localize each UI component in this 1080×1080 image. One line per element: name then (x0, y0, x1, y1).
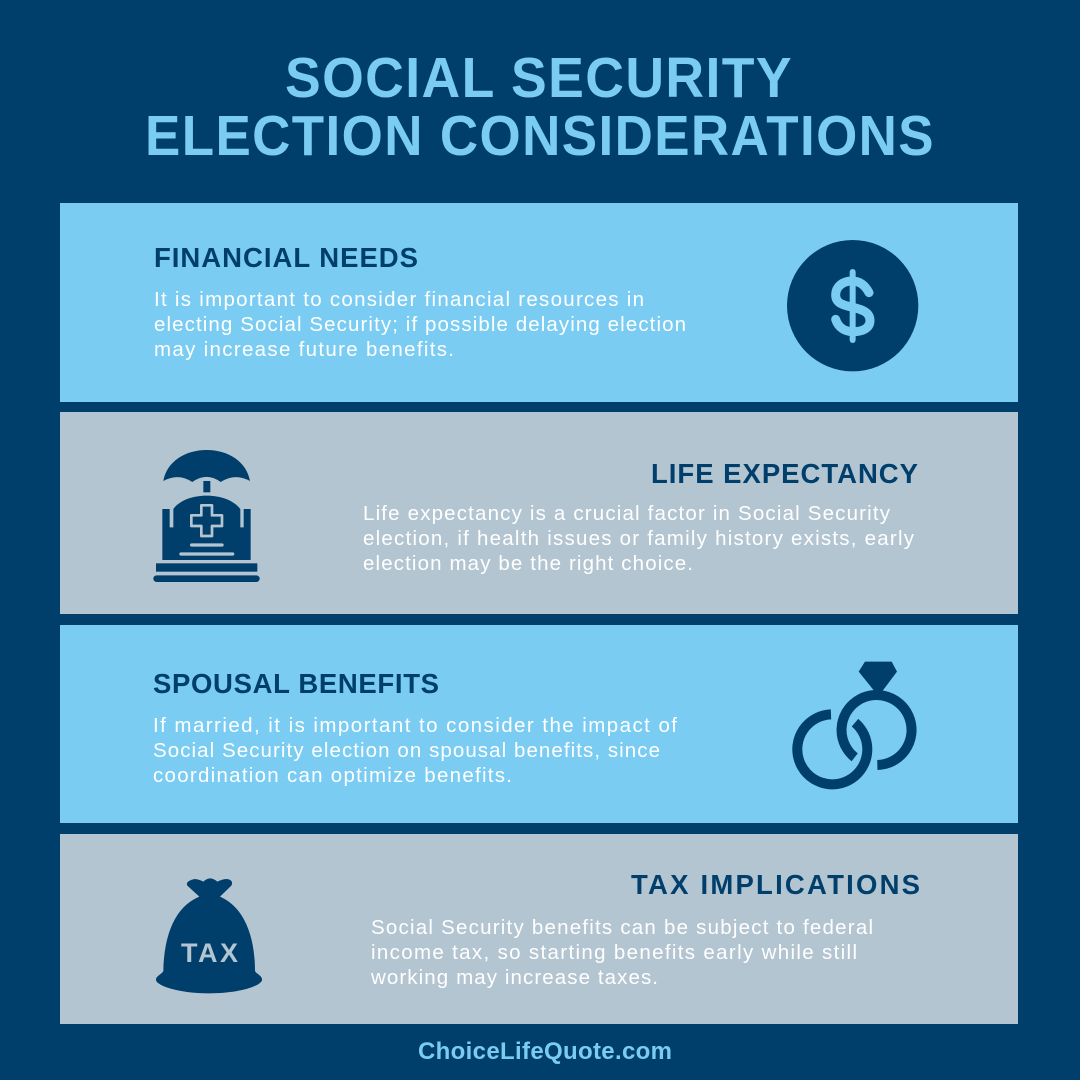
text block: financial needs: electing Social Security; if possible delaying election (154, 313, 686, 336)
text block: tax implications: Social Security benefits can be subject to federal (371, 916, 873, 939)
text block: financial needs: may increase future benefits. (154, 338, 454, 361)
footer: website: ChoiceLifeQuote.com (418, 1038, 672, 1065)
panel: tax implications (60, 834, 1018, 1024)
title (145, 46, 935, 168)
icon: tax money bag (156, 878, 262, 993)
panel: spousal benefits (60, 625, 1018, 823)
text block: life expectancy: election, if health issues or family history exists, early (363, 527, 915, 550)
text block: tax implications: income tax, so starting benefits early while still (371, 941, 857, 964)
text block: tax implications: working may increase taxes. (370, 966, 658, 989)
text block: spousal benefits: coordination can optimize benefits. (153, 764, 512, 787)
heading: life expectancy: LIFE EXPECTANCY (651, 458, 918, 489)
heading: spousal benefits: SPOUSAL BENEFITS (153, 668, 439, 699)
text block: financial needs: It is important to consider financial resources in (154, 288, 644, 311)
icon: umbrella over gravestone (153, 450, 260, 582)
icon: tax money bag: TAX (181, 938, 238, 968)
text block: life expectancy: election may be the right choice. (363, 552, 693, 575)
text block: financial needs (154, 288, 686, 361)
heading: tax implications: TAX IMPLICATIONS (631, 869, 920, 900)
text block: spousal benefits: Social Security election on spousal benefits, since (153, 739, 660, 762)
panel: financial needs (60, 203, 1018, 402)
title: SOCIAL SECURITY (285, 46, 793, 110)
text block: spousal benefits: If married, it is important to consider the impact of (153, 714, 677, 737)
text block: spousal benefits (153, 714, 677, 787)
text block: tax implications (370, 916, 873, 989)
icon: wedding rings (797, 662, 912, 784)
text block: life expectancy (363, 502, 915, 575)
heading: financial needs: FINANCIAL NEEDS (154, 242, 418, 273)
icon: dollar coin (787, 240, 918, 371)
title: ELECTION CONSIDERATIONS (145, 104, 935, 168)
panel: life expectancy (60, 412, 1018, 614)
text block: life expectancy: Life expectancy is a crucial factor in Social Security (363, 502, 891, 525)
